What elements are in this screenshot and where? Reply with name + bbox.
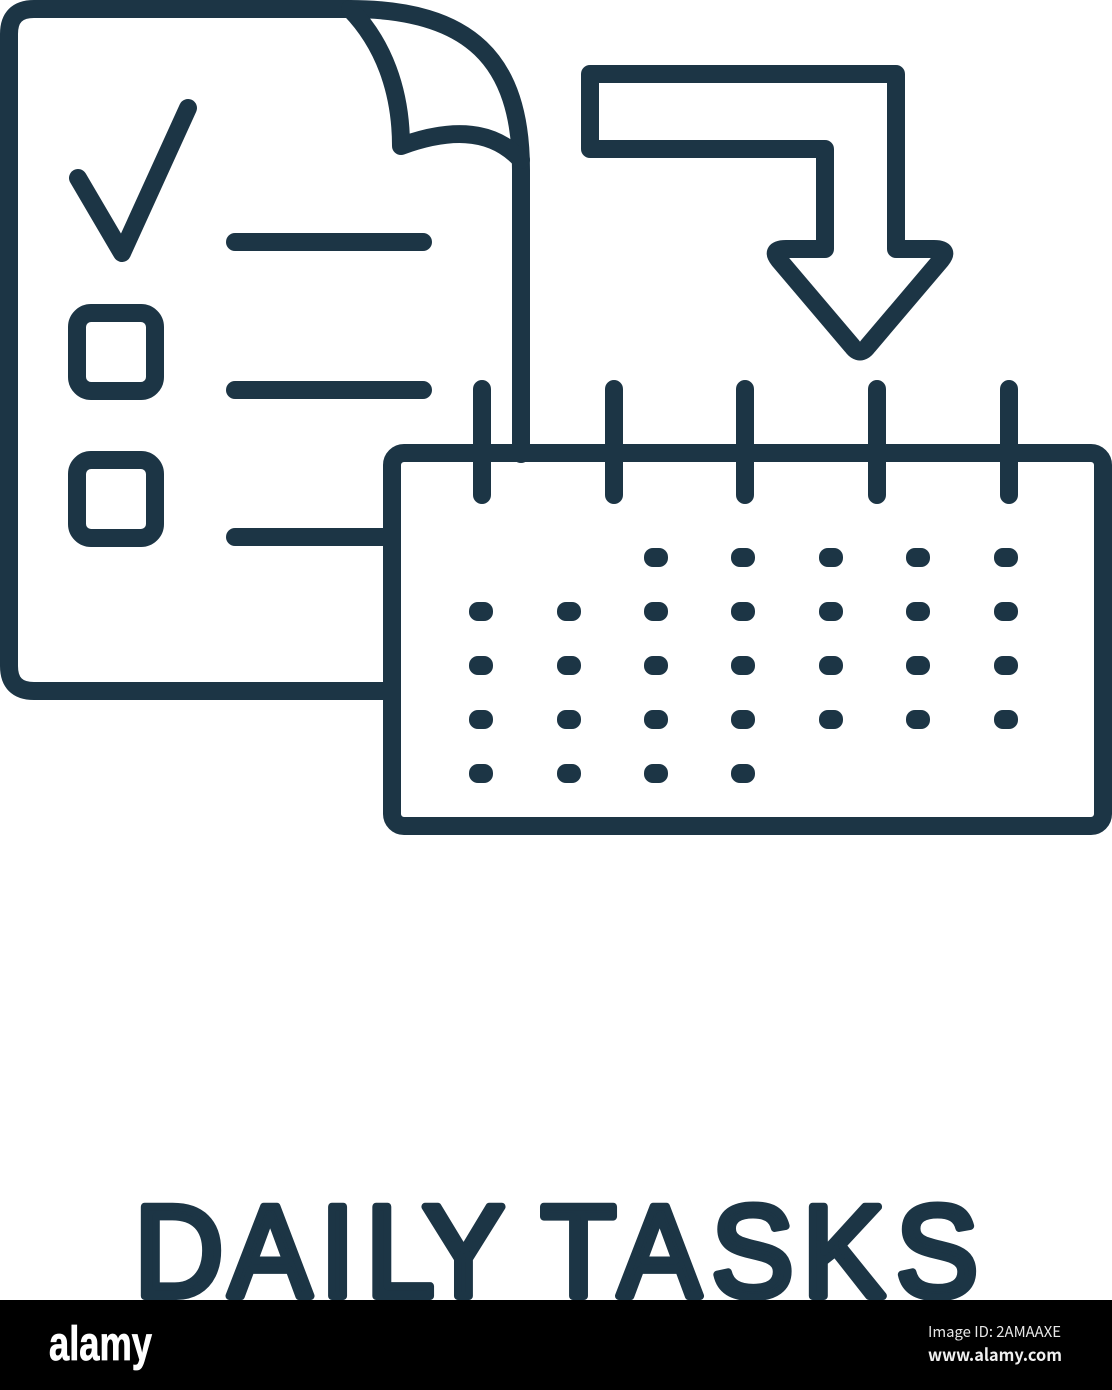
- icon: checklist document: [9, 9, 521, 691]
- title: DAILY TASKS: [134, 1179, 978, 1324]
- task line 2: [235, 381, 423, 399]
- document outline: [9, 9, 521, 691]
- icon: calendar: [392, 389, 1103, 826]
- calendar frame: [392, 453, 1103, 826]
- alamy logo: alamy: [49, 1318, 152, 1371]
- icon: empty checkbox 2: [77, 460, 155, 538]
- watermark footer bar: [0, 1300, 1112, 1390]
- arrow: bent down arrow: [590, 74, 944, 352]
- calendar rings: [482, 389, 1009, 495]
- icon: check mark: [78, 108, 188, 253]
- website: www.alamy.com: [928, 1341, 1062, 1366]
- calendar date dots: [469, 548, 1018, 783]
- page fold: [350, 9, 521, 160]
- task line 1: [235, 233, 423, 251]
- icon: empty checkbox 1: [77, 313, 155, 391]
- task line 3: [235, 528, 385, 546]
- image id: Image ID: 2AMAAXE: [928, 1321, 1061, 1342]
